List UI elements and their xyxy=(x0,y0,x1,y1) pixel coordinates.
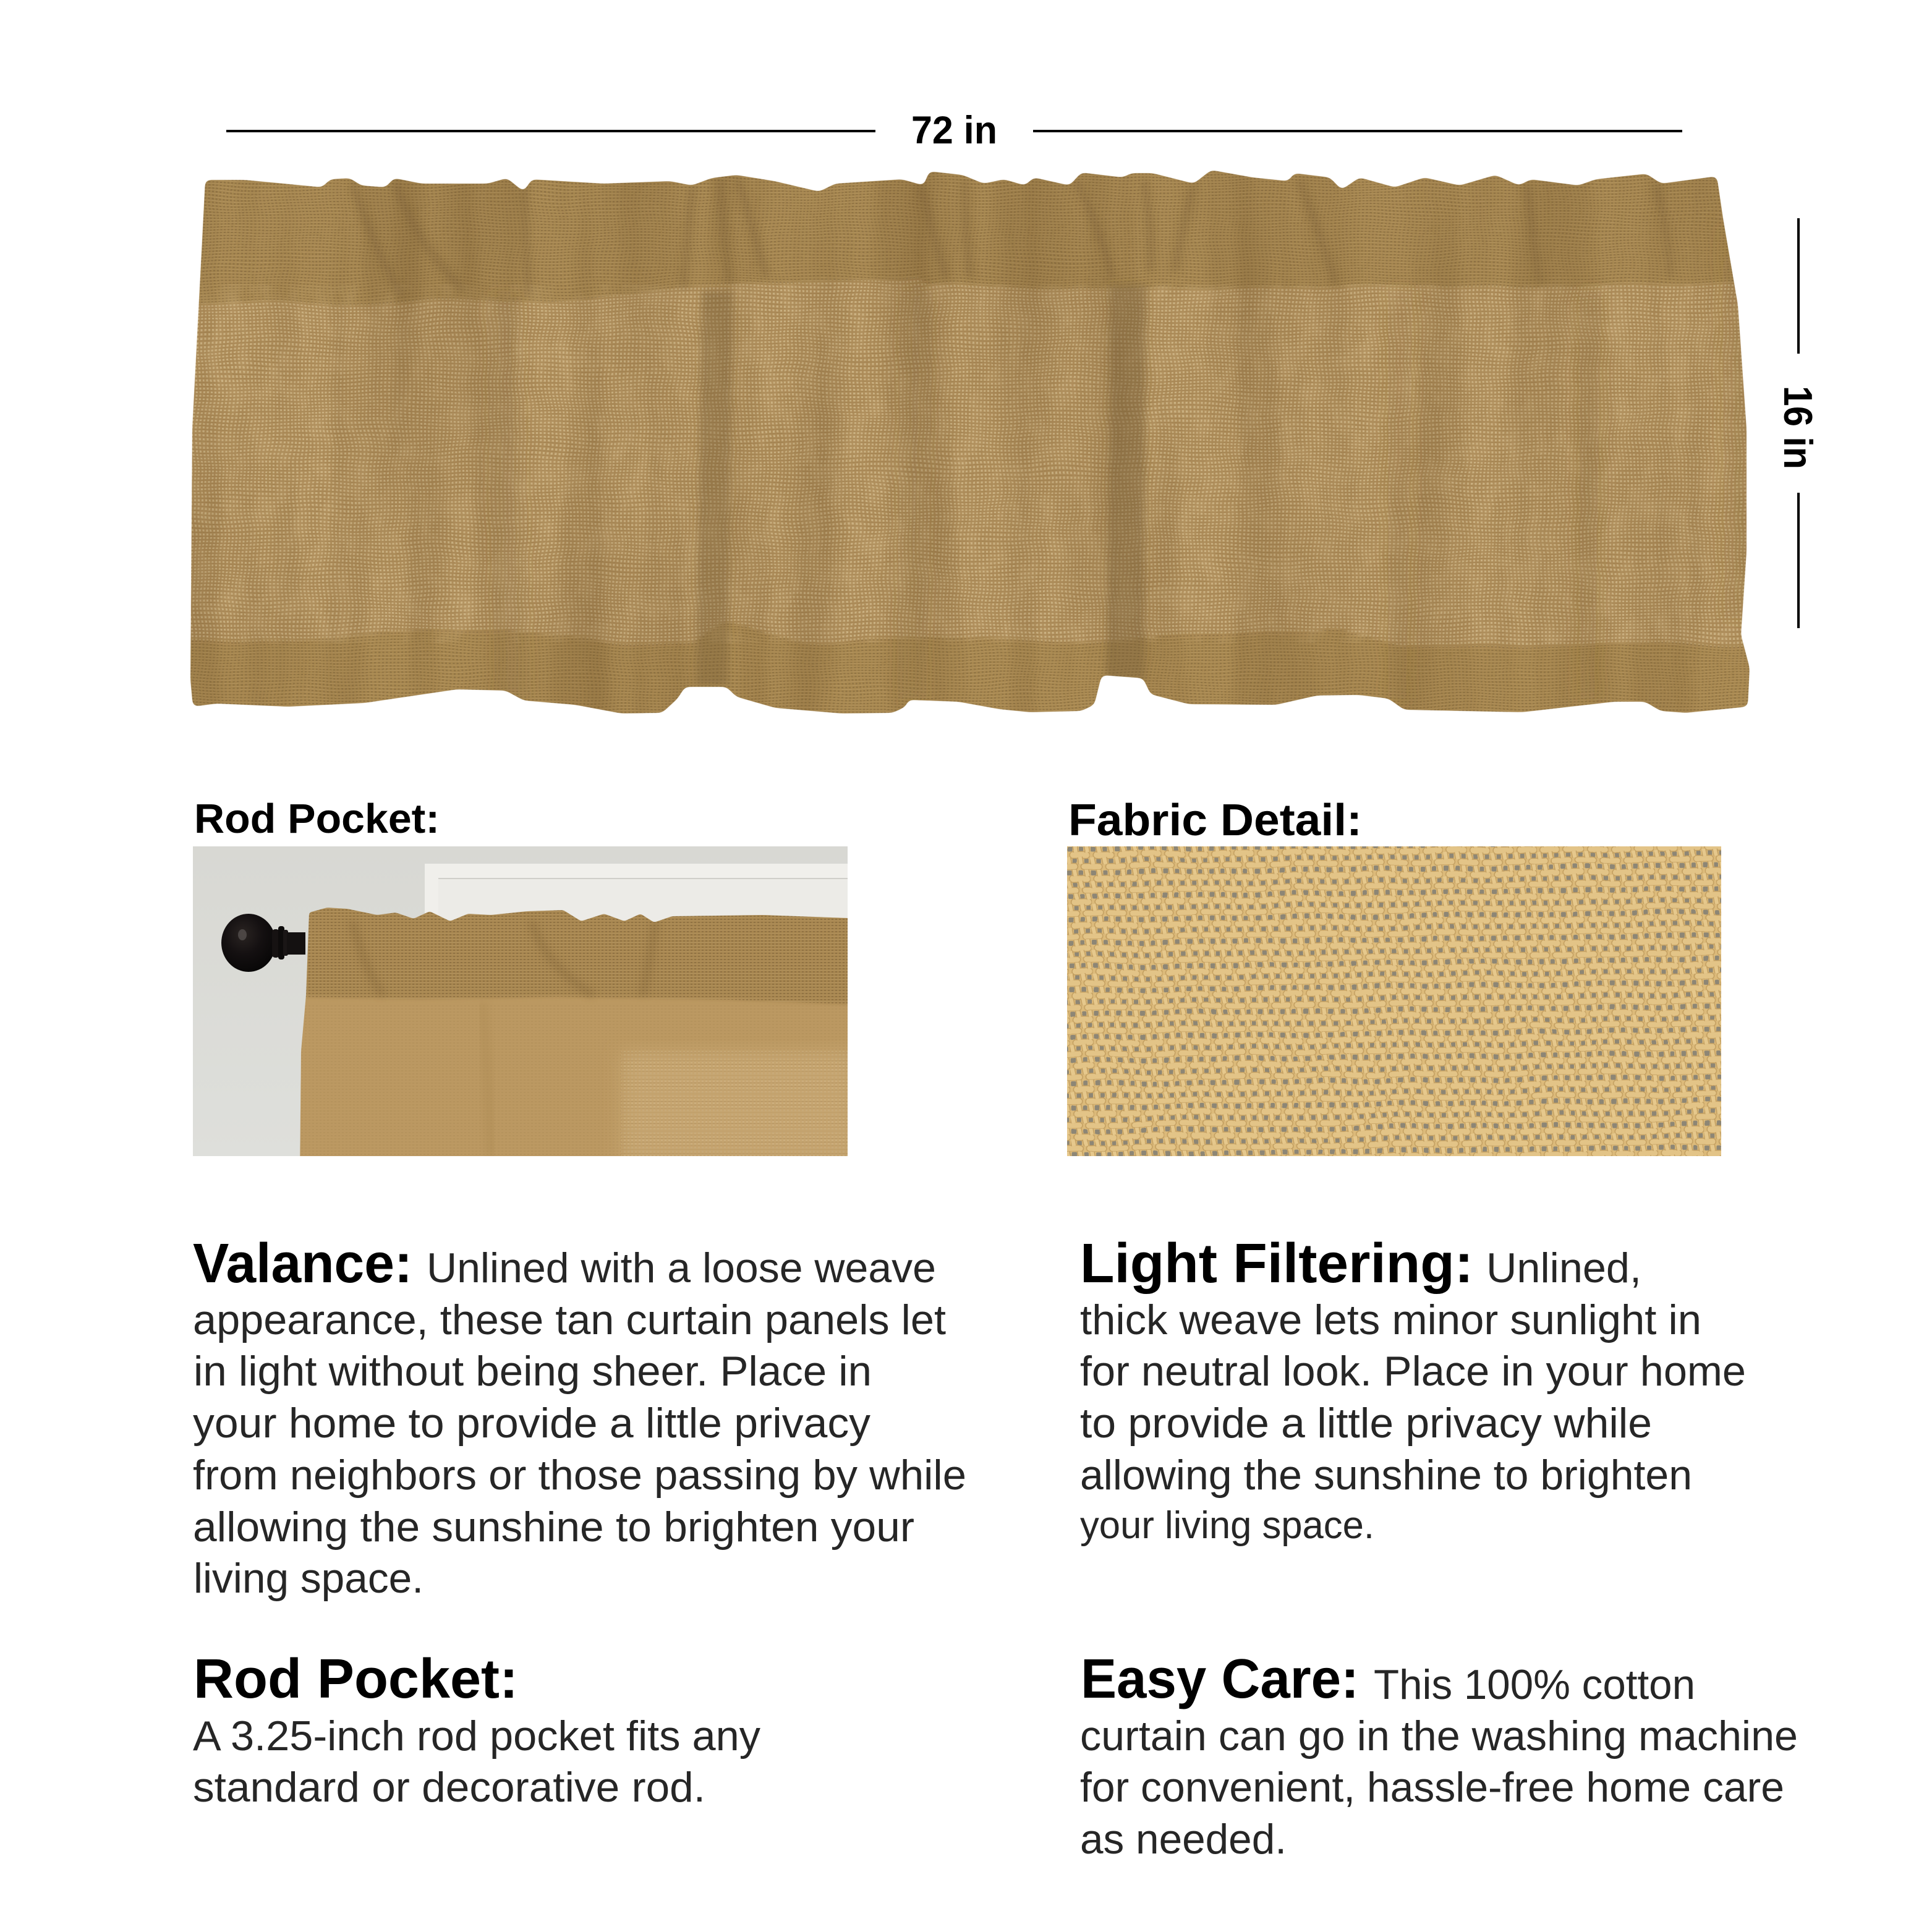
lower light panel xyxy=(621,1051,856,1162)
text block: Valance: Unlined with a loose weave xyxy=(427,1245,936,1292)
photo: rod pocket with black finial xyxy=(193,846,859,1162)
text block: Rod Pocket xyxy=(193,1648,760,1811)
text block: Easy Care: curtain can go in the washing machine xyxy=(1080,1713,1798,1760)
top rod pocket band xyxy=(199,171,1734,305)
fold shading xyxy=(496,284,1746,644)
text block: Valance xyxy=(193,1233,966,1602)
vertical streak shading xyxy=(179,161,1762,723)
text block: Light Filtering: for neutral look. Place in your home xyxy=(1080,1348,1746,1395)
gathered creases xyxy=(352,179,1669,297)
text block: Valance: in light without being sheer. Place in xyxy=(194,1348,872,1395)
text block: Light Filtering: your living space. xyxy=(1080,1504,1374,1547)
text block: Valance: your home to provide a little privacy xyxy=(193,1400,870,1447)
text block: Light Filtering: to provide a little privacy while xyxy=(1080,1400,1652,1447)
text block: Light Filtering: allowing the sunshine to brighten xyxy=(1080,1452,1692,1499)
curtain weave and bands xyxy=(173,155,1768,730)
text block: Valance: from neighbors or those passing by while xyxy=(193,1452,966,1499)
upper pocket band xyxy=(291,896,859,1005)
rod pocket curtain xyxy=(291,896,859,1162)
dimension: width 72 in xyxy=(226,109,1682,152)
dimension: height 16 in: 16 in xyxy=(1776,386,1821,469)
text block: Valance: allowing the sunshine to brighten your xyxy=(193,1504,914,1551)
photo: burlap valance curtain xyxy=(173,155,1768,730)
text block: Easy Care: Easy Care: xyxy=(1081,1648,1359,1710)
finial xyxy=(221,914,305,972)
dimension: width 72 in: 72 in xyxy=(911,109,997,152)
text block: Easy Care: for convenient, hassle-free home care xyxy=(1080,1764,1784,1811)
heading: Fabric Detail photo label: Fabric Detail: xyxy=(1068,796,1362,845)
text block: Valance: appearance, these tan curtain panels let xyxy=(193,1296,946,1343)
text block: Rod Pocket: A 3.25-inch rod pocket fits any xyxy=(193,1713,760,1760)
photo: fabric weave detail xyxy=(1067,846,1721,1156)
text block: Light Filtering: thick weave lets minor sunlight in xyxy=(1080,1296,1701,1343)
text block: Rod Pocket: standard or decorative rod. xyxy=(193,1764,705,1811)
heading: Rod Pocket photo label: Rod Pocket: xyxy=(194,796,440,842)
text block: Light Filtering: Light Filtering: xyxy=(1080,1233,1473,1295)
text block: Light Filtering xyxy=(1080,1233,1746,1547)
bottom hem band xyxy=(190,622,1750,713)
deep fold columns xyxy=(696,284,1147,686)
dimension: height 16 in xyxy=(1776,218,1821,628)
text block: Valance: living space. xyxy=(194,1555,423,1602)
text block: Valance: Valance: xyxy=(193,1233,412,1295)
text block: Rod Pocket: Rod Pocket: xyxy=(194,1648,518,1710)
text block: Easy Care: as needed. xyxy=(1080,1816,1287,1863)
text block: Easy Care xyxy=(1080,1648,1798,1863)
text block: Light Filtering: Unlined, xyxy=(1486,1245,1641,1292)
mottled highlights xyxy=(179,284,1762,643)
text block: Easy Care: This 100% cotton xyxy=(1374,1661,1695,1708)
